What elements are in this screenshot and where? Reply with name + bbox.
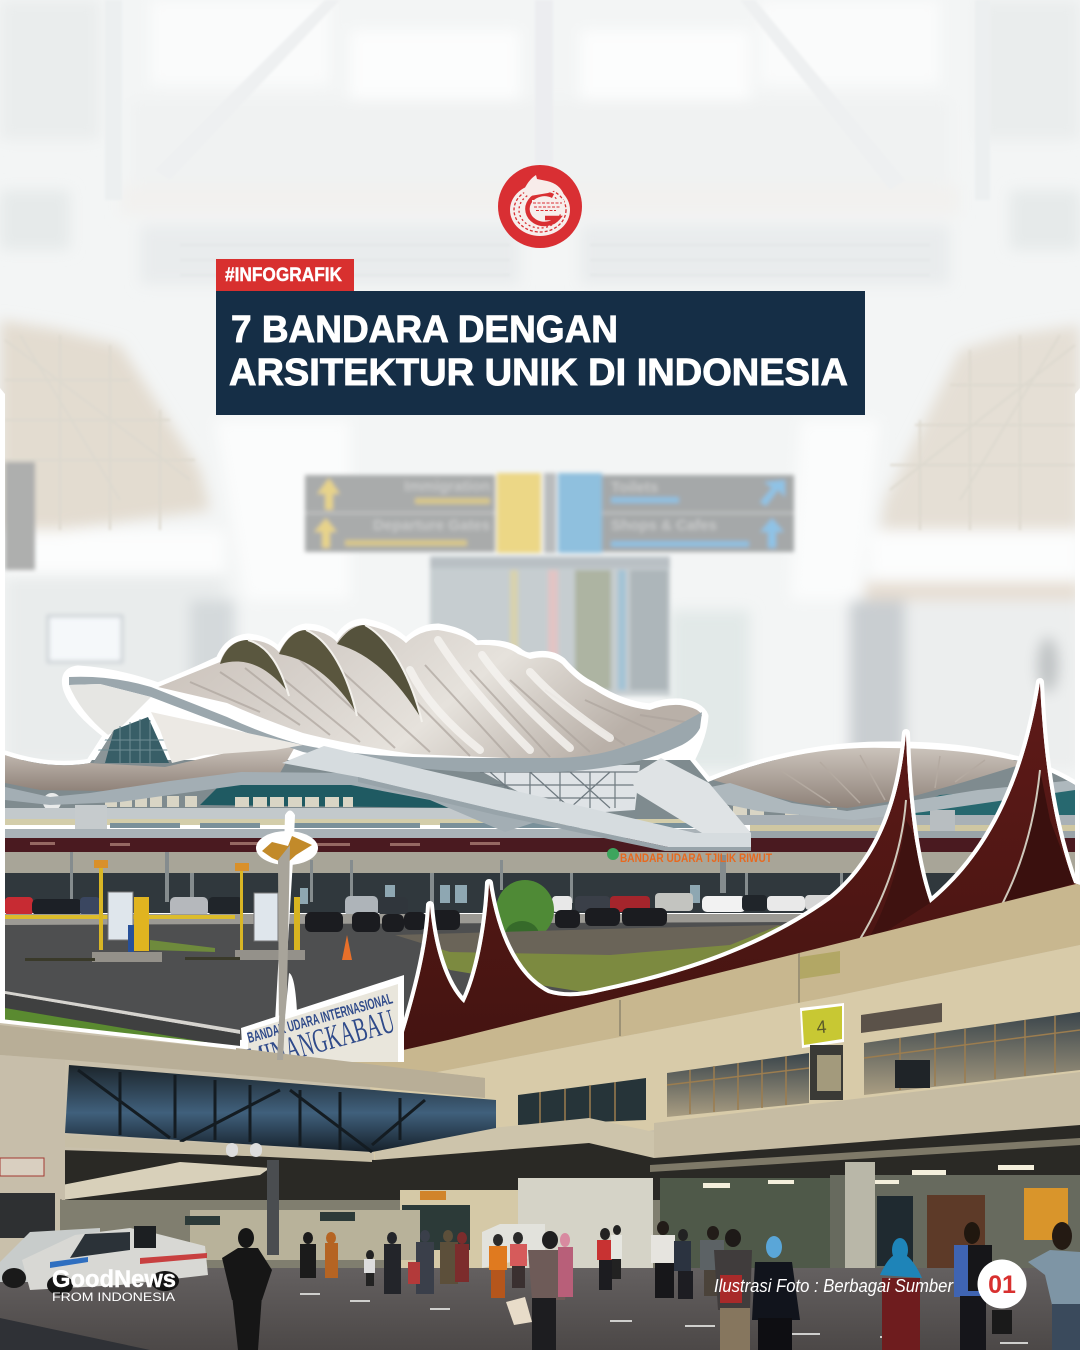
dark arched skylights [220,640,288,692]
ceiling lights [703,1165,1034,1188]
yellow gate sign: 4 [816,1017,827,1037]
title panel [216,291,865,415]
teal glazing behind the roof [200,785,448,808]
ceiling and dark terminal front [5,852,1075,873]
photo cutout: shell-roof airport terminal [5,618,1080,1046]
gonjong roof [400,682,1080,1050]
diagonal ramp canopy [282,746,751,847]
second canopy left [62,1162,270,1200]
parked cars row [5,893,835,916]
beige parapet band [350,883,1080,1085]
ground [0,1268,1080,1350]
green tree [496,880,554,932]
parking gate right [185,863,305,960]
circular airport clock [43,793,61,808]
canopy [375,1118,654,1160]
silver roof edge band [69,677,702,772]
white pickup trucks [0,1226,208,1295]
vent [861,1003,942,1033]
plaque on parapet [800,951,840,979]
low curved canopy left [5,772,551,832]
orange airport name sign [607,848,772,862]
right low shell roof [713,748,1026,808]
ground level walls [60,1200,1080,1272]
support pole [267,1160,279,1255]
title panel: ARSITEKTUR UNIK DI INDONESIA [229,352,848,394]
photo credit: Ilustrasi Foto : Berbagai Sumber [714,1276,954,1296]
second ramp canopy [630,758,751,833]
title panel: 7 BANDARA DENGAN [231,309,618,351]
windows [667,1053,809,1117]
small roof spike behind sign [284,973,297,1030]
GoodNews from Indonesia wordmark: FROM INDONESIA [52,1290,175,1304]
parking gate left [25,860,162,962]
logo: red circular eagle emblem [498,165,582,248]
light pole with ornament [256,810,318,1040]
pedestrian bridge [0,1025,485,1098]
pole in front of sign [277,1000,286,1060]
low roof left [5,745,296,791]
red hashtag tag [216,259,354,291]
traffic cone [342,935,352,960]
white van [482,1224,545,1268]
under-structure dark ceiling [60,1125,1080,1200]
background: blurred airport terminal interior: Shops & Cafes [611,517,717,534]
crowd of travellers [222,1221,1080,1350]
bridge roof edge covering the sign base [236,1048,485,1085]
photo cutout: Minangkabau airport terminal [0,682,1080,1350]
main shell roof [158,625,702,760]
yellow gate sign [800,1003,844,1048]
roadside airport name sign: BANDAR UDARA INTERNASIONAL [246,990,395,1047]
GoodNews from Indonesia wordmark: GoodNews [52,1266,176,1293]
roadside airport name sign [241,975,404,1079]
orange airport name sign: BANDAR UDARA TJILIK RIWUT [620,851,773,865]
roadside airport name sign: MINANGKABAU [244,1003,399,1079]
background: blurred airport terminal interior: Departure Gates [373,517,490,534]
front windows row [105,796,837,817]
page number badge [978,1260,1026,1308]
grass bank and embankment [420,926,782,992]
horizontal fascia bands [5,808,505,819]
teal window under left shell [93,717,169,763]
background: blurred airport terminal interior: Immigration [404,478,490,495]
right silver band [712,780,1075,815]
white underside of left shell [69,684,151,735]
left tower [0,1055,65,1200]
upper wall [370,945,1080,1180]
lower beige band [654,1072,1080,1130]
dark red upper facade band [5,838,1075,852]
page number badge: 01 [988,1271,1016,1299]
background: blurred airport terminal interior: Toilets [611,479,658,496]
white wing under shell [151,712,303,763]
road and pavement [5,914,802,925]
motorcycles row [305,908,667,932]
red hashtag tag: #INFOGRAFIK [225,265,342,286]
